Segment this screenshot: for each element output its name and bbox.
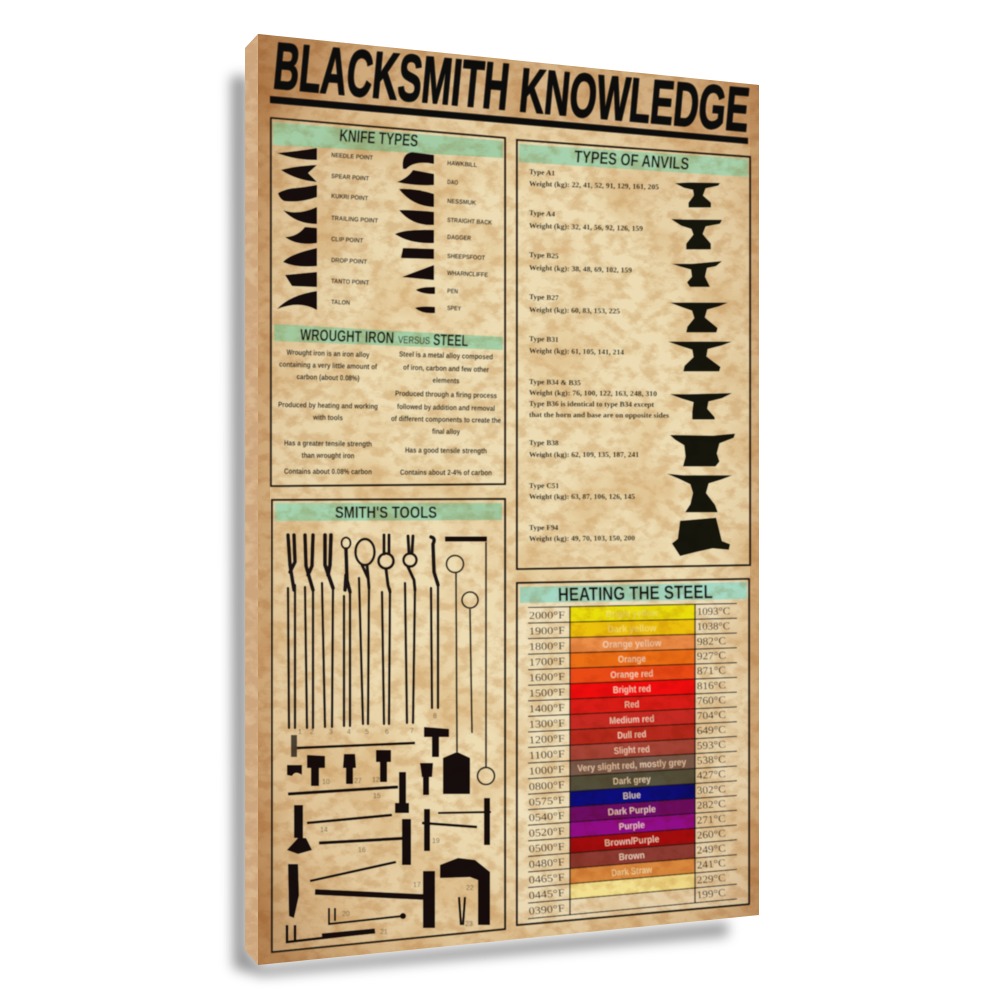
tool numbers: 1 [298, 729, 302, 736]
anvil specifications: Type B34 & B35 [529, 377, 581, 387]
fahrenheit column: 0480°F [528, 857, 565, 871]
panel: knife types and wrought iron versus steel [271, 118, 505, 486]
fahrenheit column: 0390°F [528, 903, 565, 918]
celsius column: 871°C [697, 665, 726, 677]
knife labels: left column: TANTO POINT [331, 278, 369, 287]
colour names [577, 608, 687, 879]
text block: wrought iron facts: Wrought iron is an iron alloy [286, 348, 370, 359]
tongs [288, 535, 438, 728]
title: BLACKSMITH [271, 28, 513, 124]
text block: steel facts: final alloy [432, 427, 461, 436]
colour names: Dark yellow [607, 623, 657, 635]
anvil specifications [529, 167, 669, 543]
celsius column [696, 606, 730, 901]
colour names: Orange red [610, 669, 654, 681]
colour names: Very slight red, mostly grey [577, 757, 687, 774]
knife labels: left column: TALON [331, 299, 351, 307]
panel: smith's tools [272, 499, 505, 952]
tool numbers: 21 [380, 929, 388, 936]
knife labels: left column [331, 152, 378, 307]
tool numbers: 6 [385, 729, 389, 736]
tool numbers: 3 [329, 729, 333, 736]
anvil specifications: Weight (kg): 62, 109, 135, 187, 241 [529, 450, 639, 459]
colour names: Slight red [614, 744, 650, 757]
heading band: wrought iron versus steel: STEEL [433, 332, 469, 350]
knife labels: right column: SHEEPSFOOT [447, 253, 485, 262]
fahrenheit column: 1900°F [529, 626, 565, 638]
temperature colour bands [570, 604, 695, 899]
knife labels: right column: STRAIGHT BACK [447, 217, 493, 227]
anvil specifications: Weight (kg): 61, 105, 141, 214 [529, 346, 624, 357]
anvil specifications: Weight (kg): 76, 100, 122, 163, 248, 310 [529, 388, 657, 398]
calipers and rods [445, 539, 494, 784]
fahrenheit column: 1400°F [529, 703, 565, 715]
fahrenheit column: 0500°F [528, 842, 565, 855]
knife labels: right column: DAO [447, 179, 458, 187]
colour names: Dark Straw [611, 865, 653, 879]
colour names: Brown/Purple [604, 834, 660, 849]
heading band: smith's tools [275, 503, 502, 522]
anvil specifications: Weight (kg): 60, 83, 153, 225 [529, 305, 620, 316]
tool numbers: 19 [432, 838, 440, 845]
colour names: Dark Purple [608, 804, 656, 818]
fahrenheit column: 0520°F [528, 826, 565, 840]
panel: types of anvils [517, 140, 750, 569]
knife labels: right column: NESSMUK [447, 198, 477, 207]
text block: wrought iron facts: Produced by heating and working [278, 400, 378, 411]
anvil specifications: Type A4 [529, 208, 556, 219]
celsius column: 760°C [697, 695, 726, 707]
canvas spine [245, 34, 258, 965]
text block: steel facts: of iron, carbon and few other [403, 363, 489, 374]
celsius column: 249°C [696, 843, 726, 857]
celsius column: 927°C [697, 651, 726, 663]
colour names: Medium red [609, 714, 655, 727]
heading band: smith's tools: SMITH'S TOOLS [335, 503, 437, 522]
anvil specifications: Type B27 [529, 292, 559, 302]
fahrenheit column: 0540°F [528, 811, 565, 824]
colour names: Red [624, 699, 640, 711]
text block: steel facts: Produced through a firing process [395, 389, 497, 400]
celsius column: 199°C [696, 888, 726, 901]
heading band: wrought iron versus steel: VERSUS [398, 335, 431, 347]
knife labels: right column [447, 160, 493, 313]
text block: wrought iron facts: than wrought iron [301, 451, 355, 460]
anvil specifications: that the horn and base are on opposite sides [529, 410, 669, 420]
knife labels: right column: HAWKBILL [447, 160, 477, 169]
anvil specifications: Type B36 is identical to type B34 except [529, 399, 655, 409]
tool numbers: 14 [320, 827, 328, 834]
text block: steel facts: Has a good tensile strength [405, 446, 487, 455]
tool numbers: 10 [322, 779, 330, 786]
text block: steel facts: Steel is a metal alloy composed [399, 350, 493, 361]
tool numbers: 27 [354, 778, 362, 785]
knife labels: left column: CLIP POINT [331, 236, 363, 245]
heading band: wrought iron versus steel: WROUGHT IRON [300, 327, 394, 347]
fahrenheit column: 0465°F [528, 873, 565, 886]
knife labels: right column: DAGGER [447, 234, 472, 242]
anvil specifications: Weight (kg): 63, 87, 106, 126, 145 [529, 492, 635, 501]
colour names: Blue [622, 790, 641, 802]
fahrenheit column: 1100°F [529, 749, 565, 762]
parchment texture overlay [258, 34, 759, 965]
heading band: knife types: KNIFE TYPES [339, 126, 419, 151]
heading band: knife types [273, 122, 503, 158]
colour names: Orange yellow [602, 638, 662, 651]
table rules [528, 604, 737, 919]
anvil specifications: Weight (kg): 22, 41, 52, 91, 129, 161, 205 [529, 179, 659, 191]
colour names: Bright red [613, 684, 651, 696]
knife labels: left column: NEEDLE POINT [331, 152, 373, 162]
anvil specifications: Type C51 [529, 481, 559, 490]
celsius column: 271°C [696, 814, 726, 827]
colour names: Dark grey [613, 774, 652, 788]
anvil specifications: Weight (kg): 38, 48, 69, 102, 159 [529, 263, 632, 275]
colour names: Brown [618, 850, 645, 863]
knife labels: left column: SPEAR POINT [331, 173, 369, 183]
title rule [270, 96, 748, 144]
poster face background [258, 34, 759, 965]
text block: wrought iron facts: with tools [312, 413, 343, 422]
tool numbers: 20 [342, 911, 350, 918]
fahrenheit column: 2000°F [529, 610, 565, 622]
fahrenheit column: 1200°F [529, 734, 565, 746]
celsius column: 538°C [697, 754, 726, 767]
knife blades: right column [395, 152, 435, 313]
anvil specifications: Weight (kg): 32, 41, 56, 92, 126, 159 [529, 221, 643, 233]
fahrenheit column: 1600°F [529, 672, 565, 684]
anvil specifications: Type B38 [529, 438, 559, 447]
tool numbers: 17 [413, 882, 421, 889]
hammers [287, 735, 491, 928]
fahrenheit column: 1300°F [529, 718, 565, 731]
text block: wrought iron facts: Has a greater tensile strength [284, 438, 372, 449]
tool numbers: 23 [465, 921, 473, 928]
celsius column: 282°C [696, 799, 726, 812]
tool numbers: 15 [373, 793, 381, 800]
celsius column: 241°C [696, 858, 726, 872]
heading band: heating the steel: HEATING THE STEEL [558, 582, 713, 606]
knife labels: left column: DROP POINT [331, 257, 367, 266]
knife labels: right column: PEN [447, 288, 459, 296]
anvil specifications: Weight (kg): 49, 70, 103, 150, 200 [529, 533, 635, 543]
tool numbers [298, 713, 474, 936]
text block: wrought iron facts: carbon (about 0.08%) [296, 372, 360, 383]
anvil specifications: Type B31 [529, 334, 559, 344]
anvil specifications: Type F94 [529, 523, 559, 532]
fahrenheit column [528, 610, 565, 918]
tool numbers: 2 [310, 729, 314, 736]
canvas drop shadow [231, 76, 728, 976]
text block: steel facts: elements [432, 376, 460, 385]
fahrenheit column: 1000°F [529, 765, 565, 778]
fahrenheit column: 1700°F [529, 657, 565, 669]
celsius column: 1038°C [697, 621, 730, 633]
heading band: types of anvils: TYPES OF ANVILS [574, 147, 690, 174]
text block: wrought iron facts: Contains about 0.08% carbon [284, 467, 372, 476]
tool numbers: 12 [372, 777, 380, 784]
tool numbers: 16 [358, 847, 366, 854]
celsius column: 982°C [697, 636, 726, 648]
small swages and shovel [307, 727, 470, 795]
celsius column: 704°C [697, 710, 726, 722]
fahrenheit column: 0800°F [529, 780, 565, 793]
heading band: types of anvils [519, 144, 748, 177]
celsius column: 302°C [696, 784, 726, 797]
celsius column: 1093°C [697, 606, 730, 618]
anvil specifications: Type B25 [529, 250, 559, 261]
anvil illustrations [667, 183, 735, 556]
fahrenheit column: 0575°F [528, 795, 565, 809]
celsius column: 260°C [696, 829, 726, 842]
bracket, forks and fullers [287, 858, 490, 942]
tool numbers: 5 [365, 729, 369, 736]
colour names: Purple [618, 820, 645, 833]
knife blades: left column [277, 148, 317, 310]
heading band: wrought iron versus steel [274, 324, 503, 350]
celsius column: 427°C [696, 769, 726, 782]
celsius column: 816°C [697, 680, 726, 692]
text block: steel facts: of different components to create the [391, 414, 501, 425]
tool numbers: 22 [466, 885, 474, 892]
colour names: Bright yellow [606, 608, 659, 620]
text block: steel facts: Contains about 2-4% of carbon [400, 468, 492, 477]
fahrenheit column: 1800°F [529, 641, 565, 653]
colour names: Orange [618, 654, 646, 666]
knife labels: left column: KUKRI POINT [331, 193, 368, 202]
knife labels: right column: SPEY [447, 305, 462, 313]
fahrenheit column: 0445°F [528, 888, 565, 902]
colour names: Dull red [617, 729, 647, 742]
title: KNOWLEDGE [517, 56, 752, 145]
knife labels: left column: TRAILING POINT [331, 215, 378, 225]
panel: heating the steel [517, 579, 749, 925]
tool numbers: 7 [410, 728, 414, 735]
text block: steel facts [391, 350, 501, 477]
anvil specifications: Type A1 [529, 167, 556, 178]
text block: wrought iron facts: containing a very little amount of [279, 360, 378, 371]
text block: steel facts: followed by addition and removal [397, 402, 495, 413]
tool numbers: 8 [433, 713, 437, 720]
tool numbers: 4 [347, 729, 351, 736]
fahrenheit column: 1500°F [529, 687, 565, 700]
celsius column: 593°C [697, 740, 726, 752]
celsius column: 229°C [696, 873, 726, 886]
celsius column: 649°C [697, 725, 726, 737]
text block: wrought iron facts [278, 348, 378, 476]
knife labels: right column: WHARNCLIFFE [447, 270, 489, 279]
